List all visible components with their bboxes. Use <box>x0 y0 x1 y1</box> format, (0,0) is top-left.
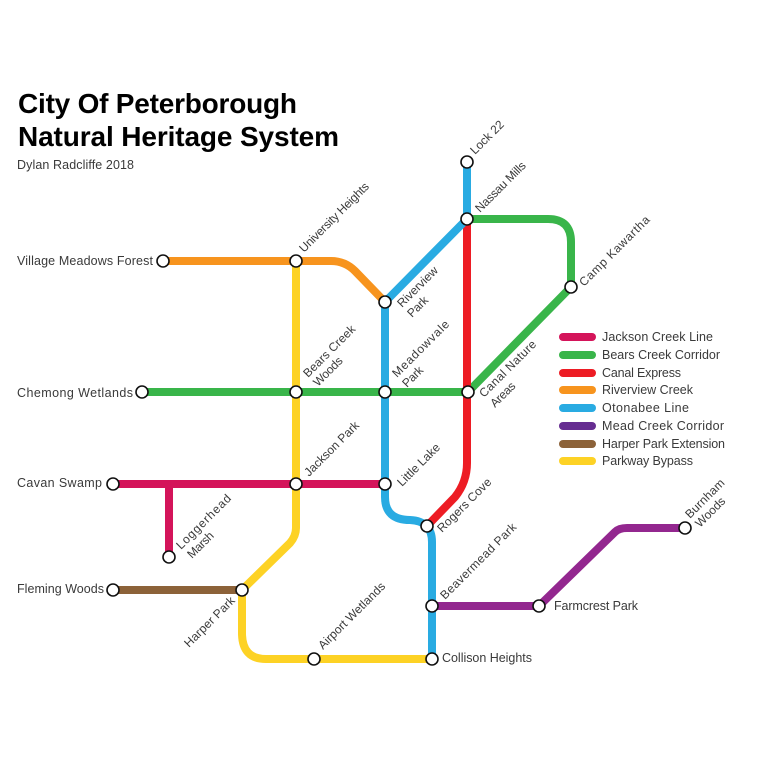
transit lines <box>113 162 685 659</box>
label: Beavermead Park: Beavermead Park <box>437 519 520 602</box>
label: Riverview Park: Park <box>404 293 432 320</box>
legend item: Mead Creek Corridor: Mead Creek Corridor <box>602 419 724 433</box>
legend item: Parkway Bypass: Parkway Bypass <box>602 454 693 468</box>
label: Meadowvale Park: Park <box>399 363 427 390</box>
title <box>18 88 339 152</box>
label: Chemong Wetlands: Chemong Wetlands <box>17 386 133 400</box>
line: Riverview Creek <box>163 261 385 302</box>
label: Farmcrest Park: Farmcrest Park <box>554 599 639 613</box>
label: Harper Park: Harper Park <box>181 593 238 650</box>
label: Fleming Woods: Fleming Woods <box>17 582 104 596</box>
station labels <box>17 117 728 665</box>
label: Cavan Swamp: Cavan Swamp <box>17 476 102 490</box>
author credit: Dylan Radcliffe 2018 <box>17 158 134 172</box>
line: Mead Creek Corridor <box>432 528 685 606</box>
label: Village Meadows Forest: Village Meadows Forest <box>17 254 154 268</box>
line: Harper Park Extension <box>113 586 242 594</box>
line: Parkway Bypass <box>242 261 432 659</box>
label: Rogers Cove: Rogers Cove <box>434 475 495 535</box>
label: Jackson Park: Jackson Park <box>301 418 363 479</box>
title: Natural Heritage System <box>18 121 339 152</box>
label: Nassau Mills: Nassau Mills <box>472 159 529 215</box>
legend item: Riverview Creek <box>563 383 694 397</box>
line: Otonabee Line <box>385 162 467 659</box>
label: University Heights: University Heights <box>296 179 372 255</box>
legend item: Canal Express <box>563 366 681 380</box>
label: Little Lake: Little Lake <box>394 440 443 489</box>
label: Bears Creek Woods: Bears Creek <box>300 321 359 380</box>
legend item: Bears Creek Corridor: Bears Creek Corridor <box>602 348 720 362</box>
legend item: Canal Express: Canal Express <box>602 366 681 380</box>
label: Bears Creek Woods: Woods <box>310 354 346 389</box>
label: Burnham Woods: Woods <box>692 494 728 530</box>
legend item: Riverview Creek: Riverview Creek <box>602 383 694 397</box>
label: Collison Heights: Collison Heights <box>442 651 532 665</box>
label: Riverview Park: Riverview <box>394 263 441 310</box>
label: Meadowvale Park: Meadowvale <box>389 317 452 380</box>
line: Jackson Creek Line <box>113 484 385 557</box>
legend item: Harper Park Extension: Harper Park Extension <box>602 437 725 451</box>
label: Camp Kawartha: Camp Kawartha <box>576 213 653 289</box>
legend item: Jackson Creek Line: Jackson Creek Line <box>602 330 713 344</box>
label: Lock 22: Lock 22 <box>467 117 507 157</box>
label: Airport Wetlands: Airport Wetlands <box>315 579 388 652</box>
legend item: Otonabee Line <box>563 401 689 415</box>
label: Loggerhead Marsh: Loggerhead <box>173 491 234 552</box>
line: Bears Creek Corridor <box>142 219 571 392</box>
legend <box>563 330 725 468</box>
station markers <box>107 156 691 665</box>
label: Canal Nature Areas: Areas <box>487 379 518 410</box>
label: Burnham Woods: Burnham <box>682 476 727 521</box>
legend item: Otonabee Line: Otonabee Line <box>602 401 689 415</box>
label: Canal Nature Areas: Canal Nature <box>476 337 539 400</box>
label: Loggerhead Marsh: Marsh <box>184 529 217 561</box>
line: Canal Express <box>427 219 467 526</box>
title: City Of Peterborough <box>18 88 297 119</box>
